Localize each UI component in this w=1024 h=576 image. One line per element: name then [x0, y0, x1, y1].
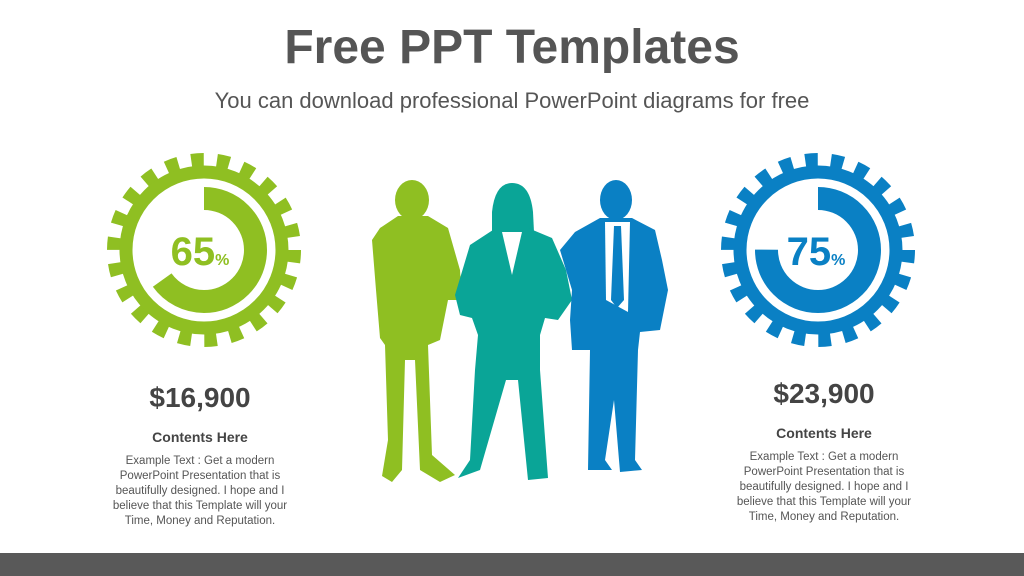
- gear: 75%: [728, 160, 908, 340]
- left body: Example Text : Get a modern PowerPoint Presentation that is beautifully designed. I hope and I believe that this Template will your Time, Money and Reputation.: [113, 455, 287, 527]
- subtitle: You can download professional PowerPoint diagrams for free: [215, 88, 809, 113]
- right body: Example Text : Get a modern PowerPoint Presentation that is beautifully designed. I hope and I believe that this Template will your Time, Money and Reputation.: [737, 451, 911, 523]
- title: Free PPT Templates: [284, 21, 740, 74]
- gear: 65%: 65%: [171, 230, 229, 274]
- footer bar: [0, 553, 1024, 576]
- right heading: Contents Here: [776, 425, 872, 441]
- silhouette: green man: [372, 180, 462, 482]
- left value: $16,900: [149, 382, 251, 413]
- right value: $23,900: [773, 378, 875, 409]
- gear: 75%: 75%: [787, 230, 845, 274]
- silhouette: teal woman: [455, 183, 572, 480]
- shirt and tie details: [502, 222, 630, 312]
- silhouette: blue man: [560, 180, 668, 472]
- gear: 65%: [114, 160, 294, 340]
- left heading: Contents Here: [152, 429, 248, 445]
